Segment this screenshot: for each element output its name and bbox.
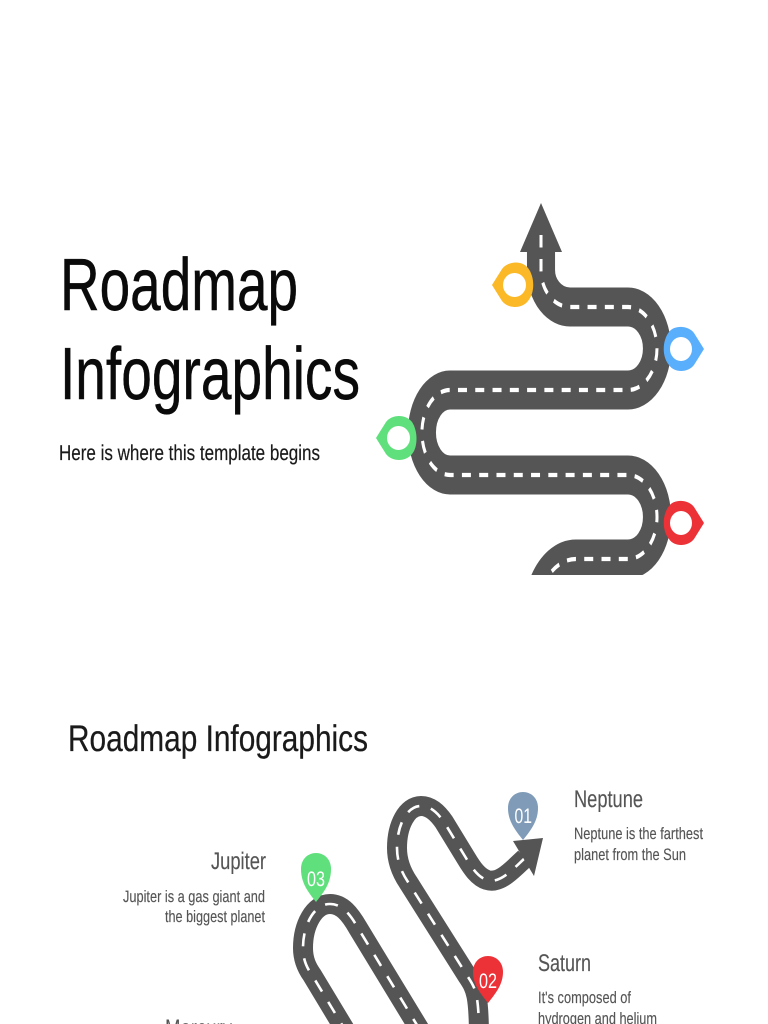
pin 02: 02 [479, 970, 497, 993]
text block: Neptune: planet from the Sun [574, 846, 686, 864]
text block: Neptune [574, 786, 703, 864]
subtitle: Here is where this template begins [59, 441, 320, 465]
text block: Saturn [538, 950, 657, 1024]
text block: Neptune: Neptune [574, 786, 643, 813]
pin: blue [664, 327, 704, 371]
text block: Saturn: It's composed of [538, 989, 631, 1007]
road centre dashes [420, 235, 658, 573]
arrow head [520, 203, 562, 252]
text block: Jupiter: the biggest planet [165, 908, 265, 926]
title: Roadmap Infographics: Roadmap [60, 243, 298, 326]
title: Roadmap Infographics: Infographics [60, 332, 360, 415]
title: Roadmap Infographics [60, 243, 360, 415]
pin 01: 01 [514, 805, 532, 828]
text block: Saturn: Saturn [538, 950, 591, 977]
heading: slide two: Roadmap Infographics [68, 718, 368, 759]
pin: red [664, 501, 704, 545]
text block: Neptune: Neptune is the farthest [574, 825, 703, 843]
pin 03: 03 [307, 868, 325, 891]
road: right segment with arrow [397, 806, 525, 1024]
pin 02 [473, 956, 503, 1003]
road arrow head [513, 838, 543, 876]
pin: green [376, 416, 416, 460]
text block: Jupiter: Jupiter [211, 848, 266, 875]
text block: Jupiter [123, 848, 266, 926]
pin 03 [301, 853, 331, 902]
road: left segment [303, 904, 420, 1024]
winding road with arrow, slide one [422, 203, 657, 625]
text block: Jupiter: Jupiter is a gas giant and [123, 888, 265, 906]
pin 01 [508, 792, 538, 840]
pin: yellow [492, 262, 533, 307]
road surface [422, 245, 657, 625]
